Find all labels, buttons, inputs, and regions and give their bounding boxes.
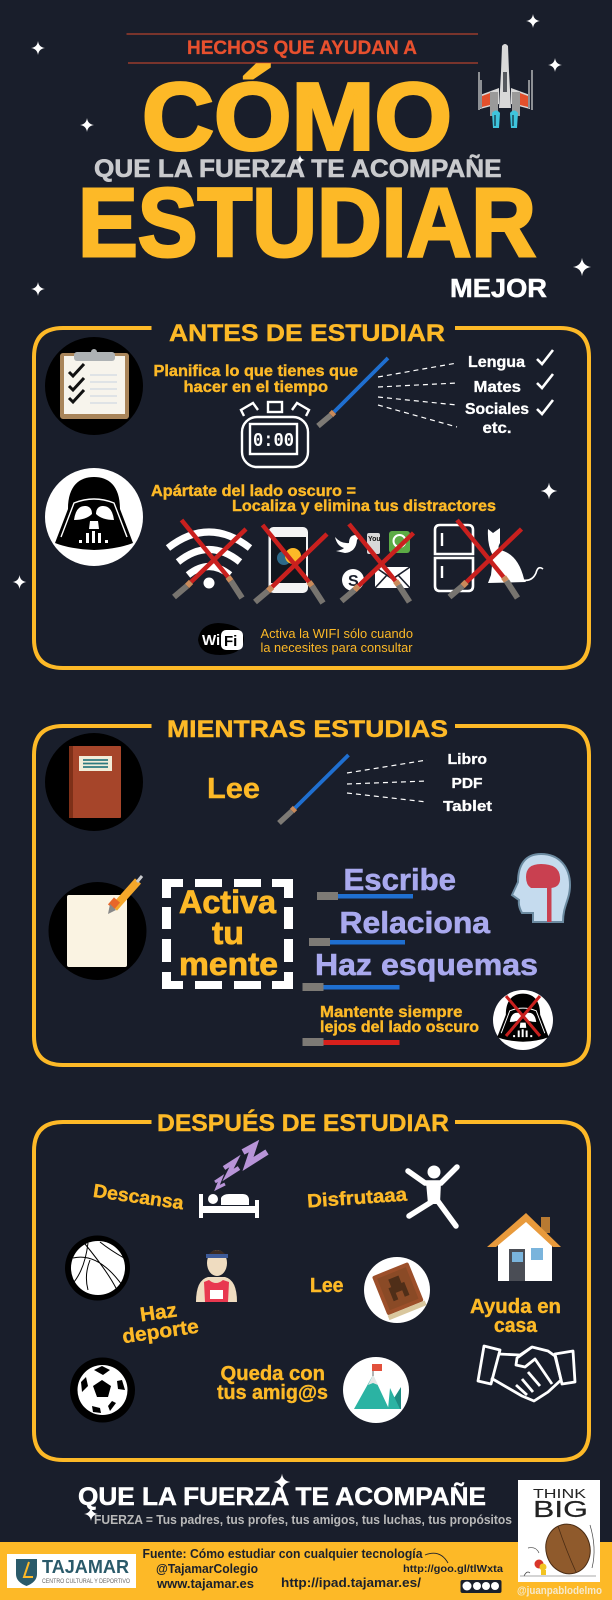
closing message	[78, 1481, 512, 1527]
label: haz deporte: deporte	[121, 1316, 200, 1348]
text: lado oscuro	[151, 483, 496, 515]
label: descansa: Descansa	[92, 1181, 185, 1214]
footer band	[0, 1542, 612, 1600]
icon: vader crossed	[493, 990, 553, 1050]
text: lado oscuro: Localiza y elimina tus distractores	[232, 498, 496, 515]
note: activa la wifi: Activa la WIFI sólo cuando	[260, 626, 413, 641]
dashed lines	[347, 760, 427, 802]
footer credits: Fuente: Cómo estudiar con cualquier tecnología	[142, 1546, 423, 1561]
subtitle: QUE LA FUERZA TE ACOMPAÑE	[94, 153, 502, 183]
action: relaciona	[309, 905, 491, 946]
heading: ANTES DE ESTUDIAR	[169, 320, 445, 347]
icon: social crossed	[335, 524, 414, 602]
icon: clipboard	[45, 337, 143, 435]
header	[78, 34, 547, 303]
list: formats	[443, 751, 492, 815]
label: queda con tus amigos	[217, 1363, 328, 1404]
credit: juanpablodelmo: @juanpablodelmo	[517, 1585, 602, 1597]
callout: activa tu mente: tu	[212, 915, 244, 951]
icon: old book	[364, 1257, 430, 1323]
icon: soccer ball	[70, 1358, 135, 1422]
icon: social crossed: S	[348, 573, 359, 590]
icon: basketball	[65, 1236, 130, 1300]
label: ayuda en casa: Ayuda en	[470, 1296, 561, 1318]
icon: zzz	[215, 1146, 267, 1188]
label: ayuda en casa: casa	[494, 1315, 538, 1337]
footer credits: @TajamarColegio	[156, 1561, 258, 1576]
icon: vader	[45, 468, 143, 566]
icon: runner	[196, 1250, 237, 1302]
label: ayuda en casa	[470, 1296, 561, 1337]
title: estudiar: ESTUDIAR	[78, 168, 536, 277]
panel: think big: THINK	[533, 1486, 586, 1501]
footer credits: http://goo.gl/tlWxta	[403, 1564, 503, 1575]
icon: bed	[199, 1194, 259, 1218]
action: escribe: Escribe	[344, 862, 456, 897]
action: mantente lejos	[302, 1004, 479, 1046]
callout: activa tu mente: Activa	[179, 884, 276, 920]
icon: mountains	[343, 1357, 409, 1423]
icon: fridge and cat crossed	[435, 520, 543, 598]
icon: head with brain	[512, 854, 570, 922]
list: formats: Tablet	[443, 798, 492, 815]
panel: mientras estudias	[34, 716, 589, 1065]
badge: creative commons	[460, 1580, 502, 1593]
label: lee: Lee	[310, 1275, 344, 1297]
panel: think big: BIG	[533, 1496, 588, 1522]
kicker: HECHOS QUE AYUDAN A	[187, 37, 417, 59]
text: planifica	[154, 363, 358, 396]
title: cómo: CÓMO	[142, 64, 452, 170]
mejor: MEJOR	[450, 275, 547, 303]
icon: wifi crossed	[168, 520, 250, 598]
list: formats: Libro	[448, 751, 487, 768]
logo: tajamar	[7, 1554, 136, 1588]
text: lee: Lee	[207, 773, 260, 805]
list: subjects: Lengua	[468, 354, 525, 371]
label: queda con tus amigos: tus amig@s	[217, 1382, 328, 1404]
panel: despues de estudiar	[34, 1109, 589, 1460]
lightsaber	[318, 358, 388, 426]
icon: wifi badge: Wi	[202, 632, 220, 649]
icon: handshake	[478, 1346, 575, 1401]
closing message: FUERZA = Tus padres, tus profes, tus amigos, tus luchas, tus propósitos	[94, 1512, 512, 1527]
icon: stopwatch	[241, 402, 309, 467]
list: subjects: Sociales	[465, 401, 529, 418]
action: relaciona: Relaciona	[340, 905, 491, 940]
icon: wifi badge: Fi	[224, 633, 237, 650]
text: lado oscuro: Apártate del lado oscuro =	[151, 483, 356, 500]
list: subjects: etc.	[482, 420, 512, 437]
list: formats: PDF	[452, 775, 482, 792]
footer credits: www.tajamar.es	[156, 1576, 254, 1591]
panel: antes de estudiar	[34, 320, 589, 668]
list: subjects: Mates	[474, 379, 521, 396]
action: mantente lejos: lejos del lado oscuro	[320, 1019, 479, 1036]
list: subjects	[465, 350, 553, 437]
icon: notepad	[48, 876, 146, 980]
callout: activa tu mente: mente	[179, 946, 278, 982]
icon: house	[487, 1213, 561, 1281]
lightsaber	[279, 755, 348, 823]
label: disfrutaaa: Disfrutaaa	[306, 1185, 408, 1212]
panel: think big	[518, 1480, 600, 1582]
footer credits: http://ipad.tajamar.es/	[281, 1575, 421, 1590]
action: mantente lejos: Mantente siempre	[320, 1004, 463, 1021]
closing message: QUE LA FUERZA TE ACOMPAÑE	[78, 1481, 486, 1511]
label: haz deporte	[121, 1299, 200, 1348]
icon: stopwatch: 0:00	[253, 430, 294, 452]
text: planifica: Planifica lo que tienes que	[154, 363, 358, 380]
note: activa la wifi: la necesites para consultar	[260, 640, 413, 655]
icon: social crossed: You	[368, 536, 381, 543]
icon: book	[45, 733, 143, 831]
heading: DESPUÉS DE ESTUDIAR	[157, 1109, 449, 1137]
icon: jumping figure	[408, 1166, 457, 1226]
label: haz deporte: Haz	[139, 1299, 178, 1326]
icon: wifi badge	[198, 623, 244, 655]
text: planifica: hacer en el tiempo	[184, 379, 328, 396]
icon: x-wing	[479, 44, 532, 128]
dashed lines	[378, 363, 457, 427]
label: queda con tus amigos: Queda con	[220, 1363, 325, 1385]
heading: MIENTRAS ESTUDIAS	[167, 716, 448, 743]
callout: activa tu mente	[162, 879, 293, 989]
icon: phone crossed	[255, 525, 327, 603]
logo: tajamar: TAJAMAR	[42, 1557, 129, 1577]
note: activa la wifi	[260, 626, 413, 655]
logo: tajamar: CENTRO CULTURAL Y DEPORTIVO	[42, 1579, 130, 1585]
footer credits	[142, 1546, 503, 1591]
action: haz esquemas: Haz esquemas	[315, 947, 538, 982]
